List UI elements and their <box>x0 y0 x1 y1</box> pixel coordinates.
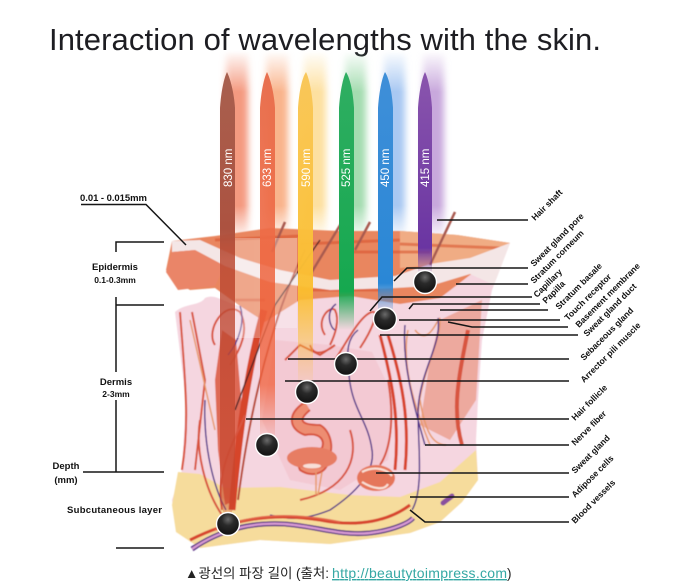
dermis tissue <box>172 243 510 548</box>
beam: 633 nm: 633 nm <box>262 149 274 187</box>
left-hand depth scale: Epidermis <box>92 262 138 273</box>
left-hand depth scale <box>53 193 186 548</box>
beam: 830 nm <box>220 72 235 520</box>
nerve fibers <box>205 304 438 518</box>
left-hand depth scale: Depth <box>53 461 80 472</box>
beam: 450 nm <box>378 72 393 312</box>
right-hand anatomy labels: Capillary <box>531 267 564 299</box>
beam: 830 nm: 830 nm <box>223 149 235 187</box>
beam: 633 nm <box>260 72 275 440</box>
second follicle and duct on the right <box>380 300 482 470</box>
caption: ) <box>507 566 512 581</box>
epidermis left lobe <box>166 250 225 290</box>
right-hand anatomy labels: Hair shaft <box>529 187 565 222</box>
left-hand depth scale: Subcutaneous layer <box>67 505 162 516</box>
penetration depth dots <box>216 270 436 536</box>
right-hand anatomy labels: Adipose cells <box>569 453 616 499</box>
subcutaneous fat <box>172 450 478 548</box>
skin cross-section illustration <box>166 212 510 549</box>
left-hand depth scale: 0.1-0.3mm <box>94 275 136 285</box>
beam: 525 nm <box>339 72 354 330</box>
beam: 450 nm: 450 nm <box>380 149 392 187</box>
caption: ▲광선의 파장 길이 (출처: <box>185 566 329 581</box>
right-hand anatomy labels: Sweat gland <box>569 433 612 475</box>
right-hand anatomy labels <box>528 187 643 525</box>
right-hand anatomy labels: Papilla <box>540 279 567 305</box>
right-hand anatomy labels: Hair follicle <box>569 382 609 422</box>
left-hand depth scale: 2-3mm <box>102 389 130 399</box>
capillary loops <box>180 309 440 515</box>
right-hand anatomy labels: Blood vessels <box>569 477 617 525</box>
right-hand anatomy labels: Sweat gland duct <box>581 281 638 338</box>
stratum corneum pale band <box>172 240 510 290</box>
beam glows <box>226 50 444 245</box>
pink central tissue <box>262 340 395 490</box>
beam: 525 nm: 525 nm <box>341 149 353 187</box>
right-hand anatomy labels: Sweat gland pore <box>528 211 586 268</box>
right-hand anatomy labels: Arrector pili muscle <box>578 320 643 384</box>
coiled sweat gland <box>287 402 337 495</box>
arteries along base <box>190 505 410 540</box>
vein: blood vessel <box>192 518 413 549</box>
caption <box>185 565 512 581</box>
right-hand anatomy labels: Basement membrane <box>573 261 642 329</box>
left-hand depth scale: Dermis <box>100 377 132 388</box>
beam: 415 nm: 415 nm <box>420 149 432 187</box>
beam: 415 nm <box>418 72 432 272</box>
title: Interaction of wavelengths with the skin. <box>49 22 601 57</box>
left-hand depth scale: 0.01 - 0.015mm <box>80 193 147 204</box>
vein highlight <box>192 518 413 549</box>
hair follicle <box>215 212 455 510</box>
beam: 590 nm: 590 nm <box>301 149 313 187</box>
right-hand anatomy labels: Nerve fiber <box>569 408 609 447</box>
right-hand anatomy labels: Stratum corneum <box>528 228 586 285</box>
small vessel section <box>443 496 452 503</box>
second sweat gland <box>357 380 395 491</box>
right-hand anatomy labels: Touch receptor <box>562 271 614 322</box>
right-hand anatomy labels: Stratum basale <box>553 261 604 311</box>
epidermis right lighter area <box>400 231 510 268</box>
caption: http://beautytoimpress.com <box>332 565 507 581</box>
leader lines to right-hand labels <box>246 220 578 522</box>
left-hand depth scale: (mm) <box>54 475 78 486</box>
right-hand anatomy labels: Sebaceous gland <box>578 305 635 362</box>
pale light bands over skin <box>235 238 297 338</box>
beam: 590 nm <box>298 72 313 385</box>
epidermis streaks <box>215 236 500 300</box>
epidermis layer <box>166 228 510 322</box>
